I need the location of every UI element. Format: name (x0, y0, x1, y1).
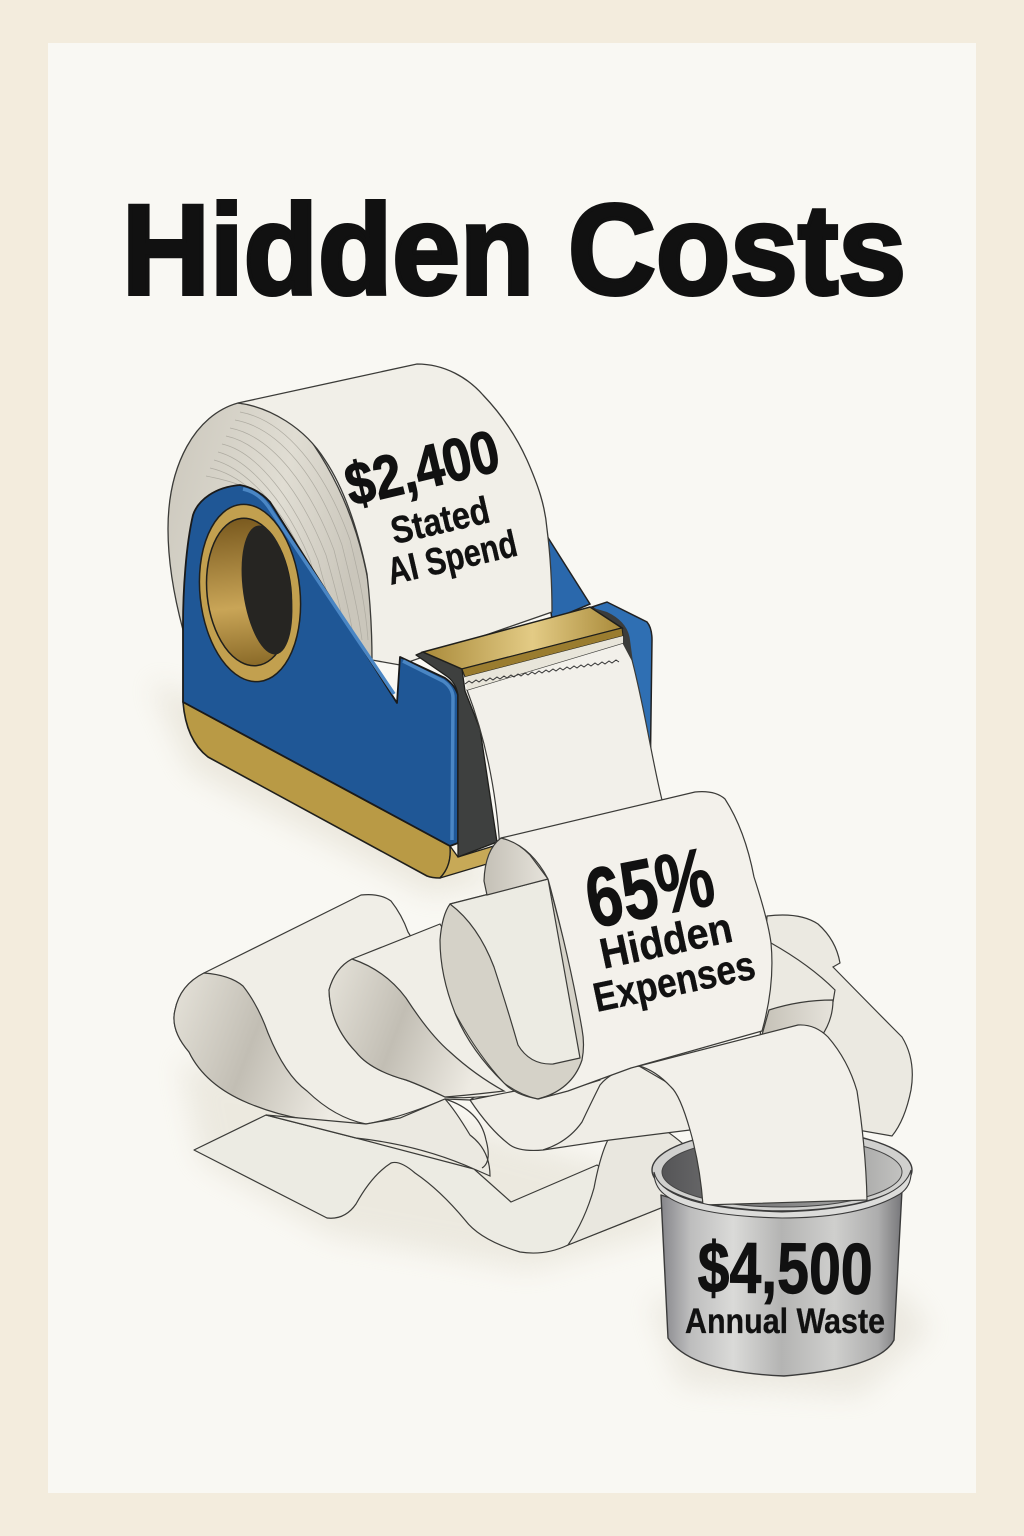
ribbon of paper (174, 792, 912, 1253)
dispenser gold base right (440, 845, 497, 878)
tape roll face (238, 364, 552, 665)
label: hidden expenses: 65% (578, 829, 721, 946)
dispenser gold base (183, 702, 450, 878)
paper strip into pail (639, 1025, 867, 1205)
dispenser blue side (183, 485, 458, 846)
back right loop (760, 915, 912, 1136)
dispensed tape strip (467, 643, 662, 850)
pail (639, 1025, 912, 1376)
label: annual waste: $4,500 (697, 1228, 873, 1310)
wave fold under strip (568, 1118, 700, 1245)
floor shadows (150, 680, 930, 1395)
dispenser dark inner right (590, 607, 646, 790)
central wave (470, 1066, 693, 1150)
second loop (440, 879, 600, 1099)
middle folds (266, 1099, 490, 1176)
label: stated spend: $2,400 (339, 417, 506, 519)
label: stated spend (339, 417, 521, 594)
title: Hidden Costs (122, 179, 906, 322)
third loop (329, 924, 540, 1098)
label: annual waste (685, 1228, 885, 1341)
pail rim front (654, 1170, 911, 1218)
pail body (661, 1190, 902, 1376)
label: stated spend: AI Spend (383, 523, 521, 594)
fourth loop (174, 895, 500, 1124)
big loop face (501, 792, 772, 1099)
dispenser far wall (540, 525, 590, 620)
pail interior (652, 1129, 912, 1211)
label: annual waste: Annual Waste (685, 1302, 885, 1341)
label: stated spend: Stated (387, 490, 494, 553)
blue highlight edges (243, 489, 453, 840)
label: hidden expenses (578, 829, 759, 1021)
label: hidden expenses: Hidden (596, 904, 737, 979)
tape roll side (168, 403, 375, 660)
serrated edge (465, 660, 619, 684)
label: hidden expenses: Expenses (589, 942, 759, 1021)
hub: gold ring and hole (191, 499, 309, 687)
tape dispenser (168, 364, 662, 878)
roll layer lines (206, 412, 368, 640)
back right fold (760, 1000, 833, 1042)
dark cutter housing (416, 652, 497, 857)
cutter bar gold (423, 607, 623, 690)
lower flat sheet (194, 1115, 661, 1253)
big loop inner (484, 838, 548, 895)
dispenser right end (592, 602, 652, 790)
